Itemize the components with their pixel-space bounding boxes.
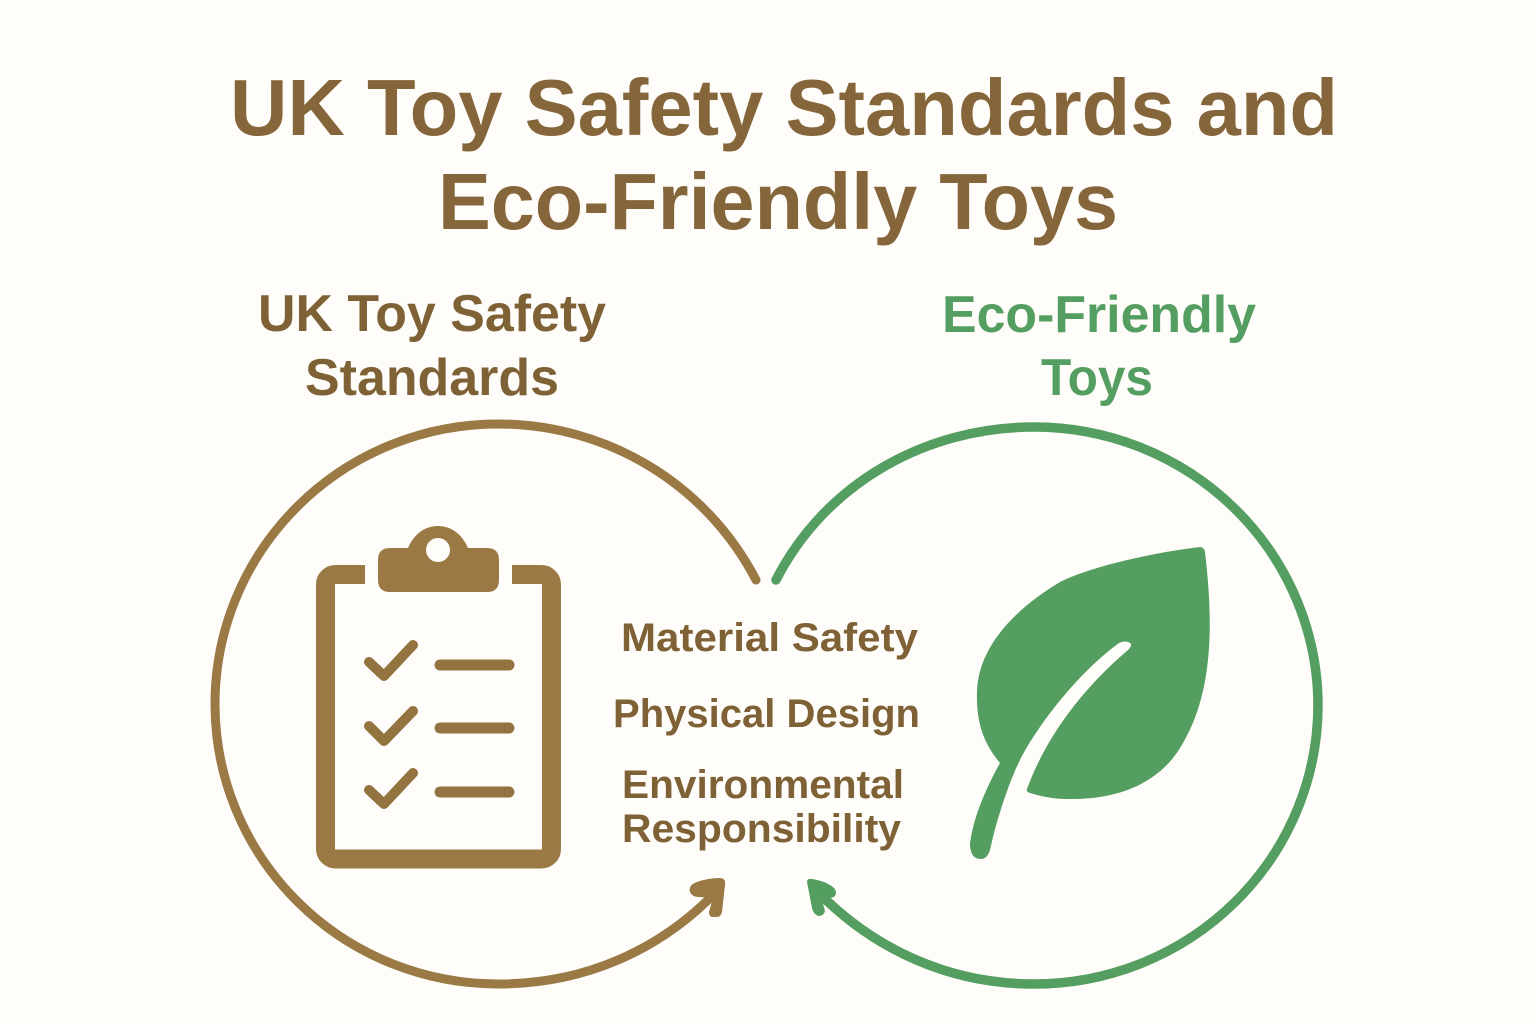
- center labels: [613, 616, 920, 851]
- heading: Eco-Friendly Toys: Toys: [1041, 349, 1153, 407]
- brown circular arrow: [215, 424, 756, 984]
- icon: clipboard checklist: [325, 526, 552, 859]
- title: UK Toy Safety Standards and: [230, 63, 1338, 152]
- heading: UK Toy Safety Standards: UK Toy Safety: [258, 285, 606, 343]
- heading: Eco-Friendly Toys: [942, 286, 1256, 407]
- heading: UK Toy Safety Standards: [258, 285, 606, 407]
- heading: Eco-Friendly Toys: Eco-Friendly: [942, 286, 1256, 344]
- checklist rows: [369, 645, 509, 804]
- center labels: Material Safety: [621, 616, 919, 660]
- green circular arrow: [776, 427, 1318, 984]
- center labels: Responsibility: [622, 807, 902, 851]
- center labels: Physical Design: [613, 692, 920, 736]
- center labels: Environmental: [622, 763, 904, 807]
- title: [230, 63, 1338, 246]
- heading: UK Toy Safety Standards: Standards: [305, 349, 559, 407]
- title: Eco-Friendly Toys: [438, 157, 1118, 246]
- icon: leaf: [970, 547, 1210, 859]
